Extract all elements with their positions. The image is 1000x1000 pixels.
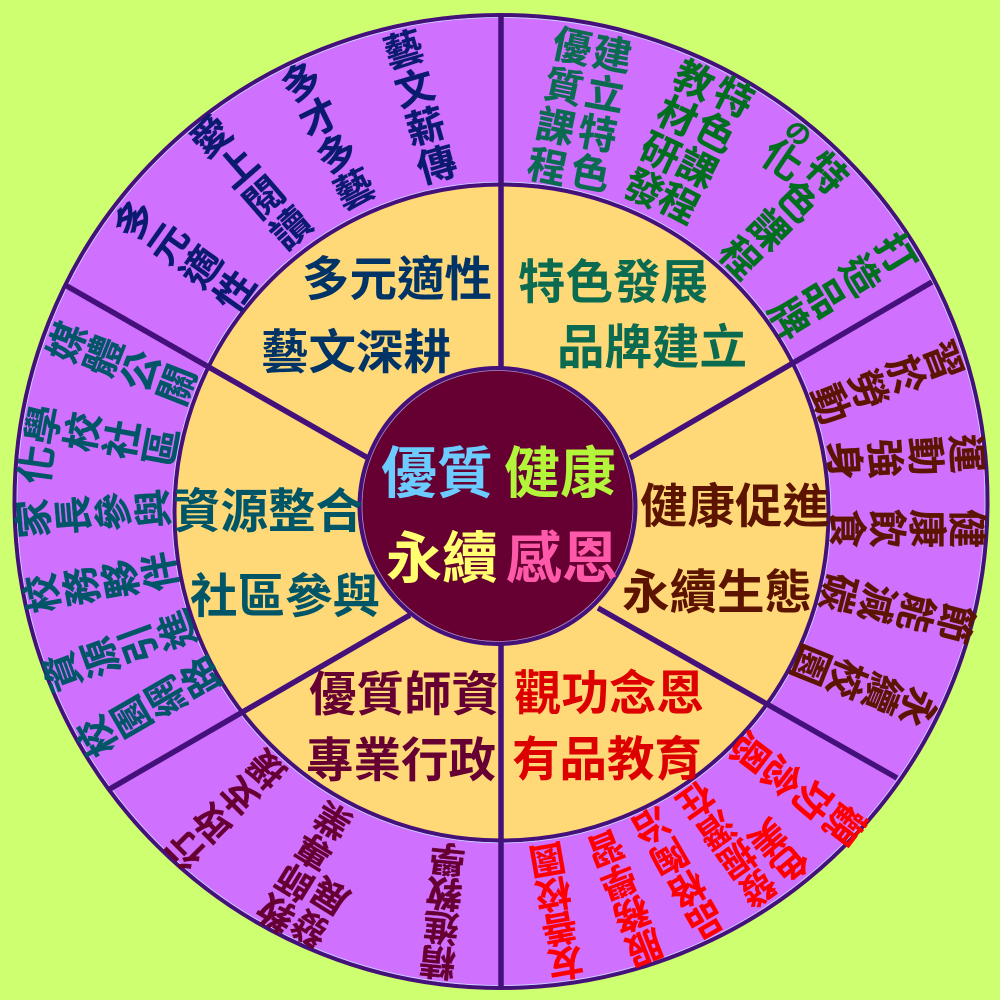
item: 運動強身 (823, 427, 988, 481)
item: 行政支援 (160, 743, 296, 879)
panel: gratitude and character (512, 668, 876, 985)
item: 品格陶冶 (626, 799, 735, 946)
item: 校務夥伴 (19, 549, 184, 622)
middle ring (174, 184, 828, 840)
panel: health promotion (622, 330, 988, 734)
item: 習於勞動 (803, 330, 969, 429)
item: 化 (751, 129, 810, 186)
heading: professional administration: 專業行政 (306, 735, 496, 788)
item: 多元適性 (104, 192, 263, 323)
center hub (360, 368, 636, 644)
item: 教師專業 (251, 795, 362, 941)
keyword: sustainability: 永續 (386, 527, 498, 590)
heading: health promotion: 健康促進 (640, 481, 830, 534)
item: 愛上閱讀 (179, 109, 318, 260)
item: 校園網路 (70, 650, 230, 768)
item: 媒體公關 (39, 316, 202, 415)
item: 資源引進 (37, 605, 204, 702)
heading: brand building: 品牌建立 (557, 322, 747, 375)
item: 家長參與 (12, 488, 175, 545)
item: 觀功念恩 (723, 721, 876, 852)
panel: resource integration (12, 316, 380, 768)
item: 色美 (743, 810, 819, 890)
item: 教材研發 (613, 51, 720, 214)
heading: deep arts: 藝文深耕 (261, 327, 451, 380)
item: 特色課程 (648, 68, 760, 230)
item: 發掘潛在 (671, 774, 787, 914)
heading: character education: 有品教育 (512, 734, 702, 787)
heading: sustainable ecology: 永續生態 (622, 567, 812, 620)
heading: featured development: 特色發展 (518, 257, 708, 310)
item: 服務學習 (582, 824, 673, 971)
item: 精進教學 (418, 840, 472, 983)
item: 打造品牌 (758, 221, 924, 346)
item: 永續校園 (786, 635, 946, 734)
item: 優質課程 (518, 22, 596, 191)
panel: quality teachers (160, 669, 499, 983)
item: 特色課程 (708, 141, 855, 286)
item: 建立特色 (562, 30, 635, 197)
panel: diverse aptitude (104, 25, 492, 380)
item: 發展 (285, 870, 360, 956)
heading: resource integration: 資源整合 (173, 486, 363, 539)
item: 節能減碳 (814, 564, 981, 647)
item: 學校社區 (19, 402, 184, 475)
keyword: gratitude: 感恩 (506, 527, 618, 590)
center keywords (381, 442, 618, 590)
item: 健康飲食 (828, 504, 988, 548)
heading: gratitude: 觀功念恩 (514, 668, 704, 721)
item: 友善校園 (527, 839, 591, 985)
heading: diverse aptitude: 多元適性 (302, 254, 492, 307)
item: の (777, 113, 817, 151)
item: 化 (13, 443, 58, 492)
keyword: quality: 優質 (381, 442, 493, 505)
item: 藝文薪傳 (374, 25, 461, 191)
heading: quality teachers: 優質師資 (309, 669, 499, 722)
item: 多才多藝 (270, 56, 380, 218)
panel: featured development (518, 22, 924, 375)
keyword: health: 健康 (504, 442, 616, 505)
heading: community participation: 社區參與 (190, 571, 380, 624)
